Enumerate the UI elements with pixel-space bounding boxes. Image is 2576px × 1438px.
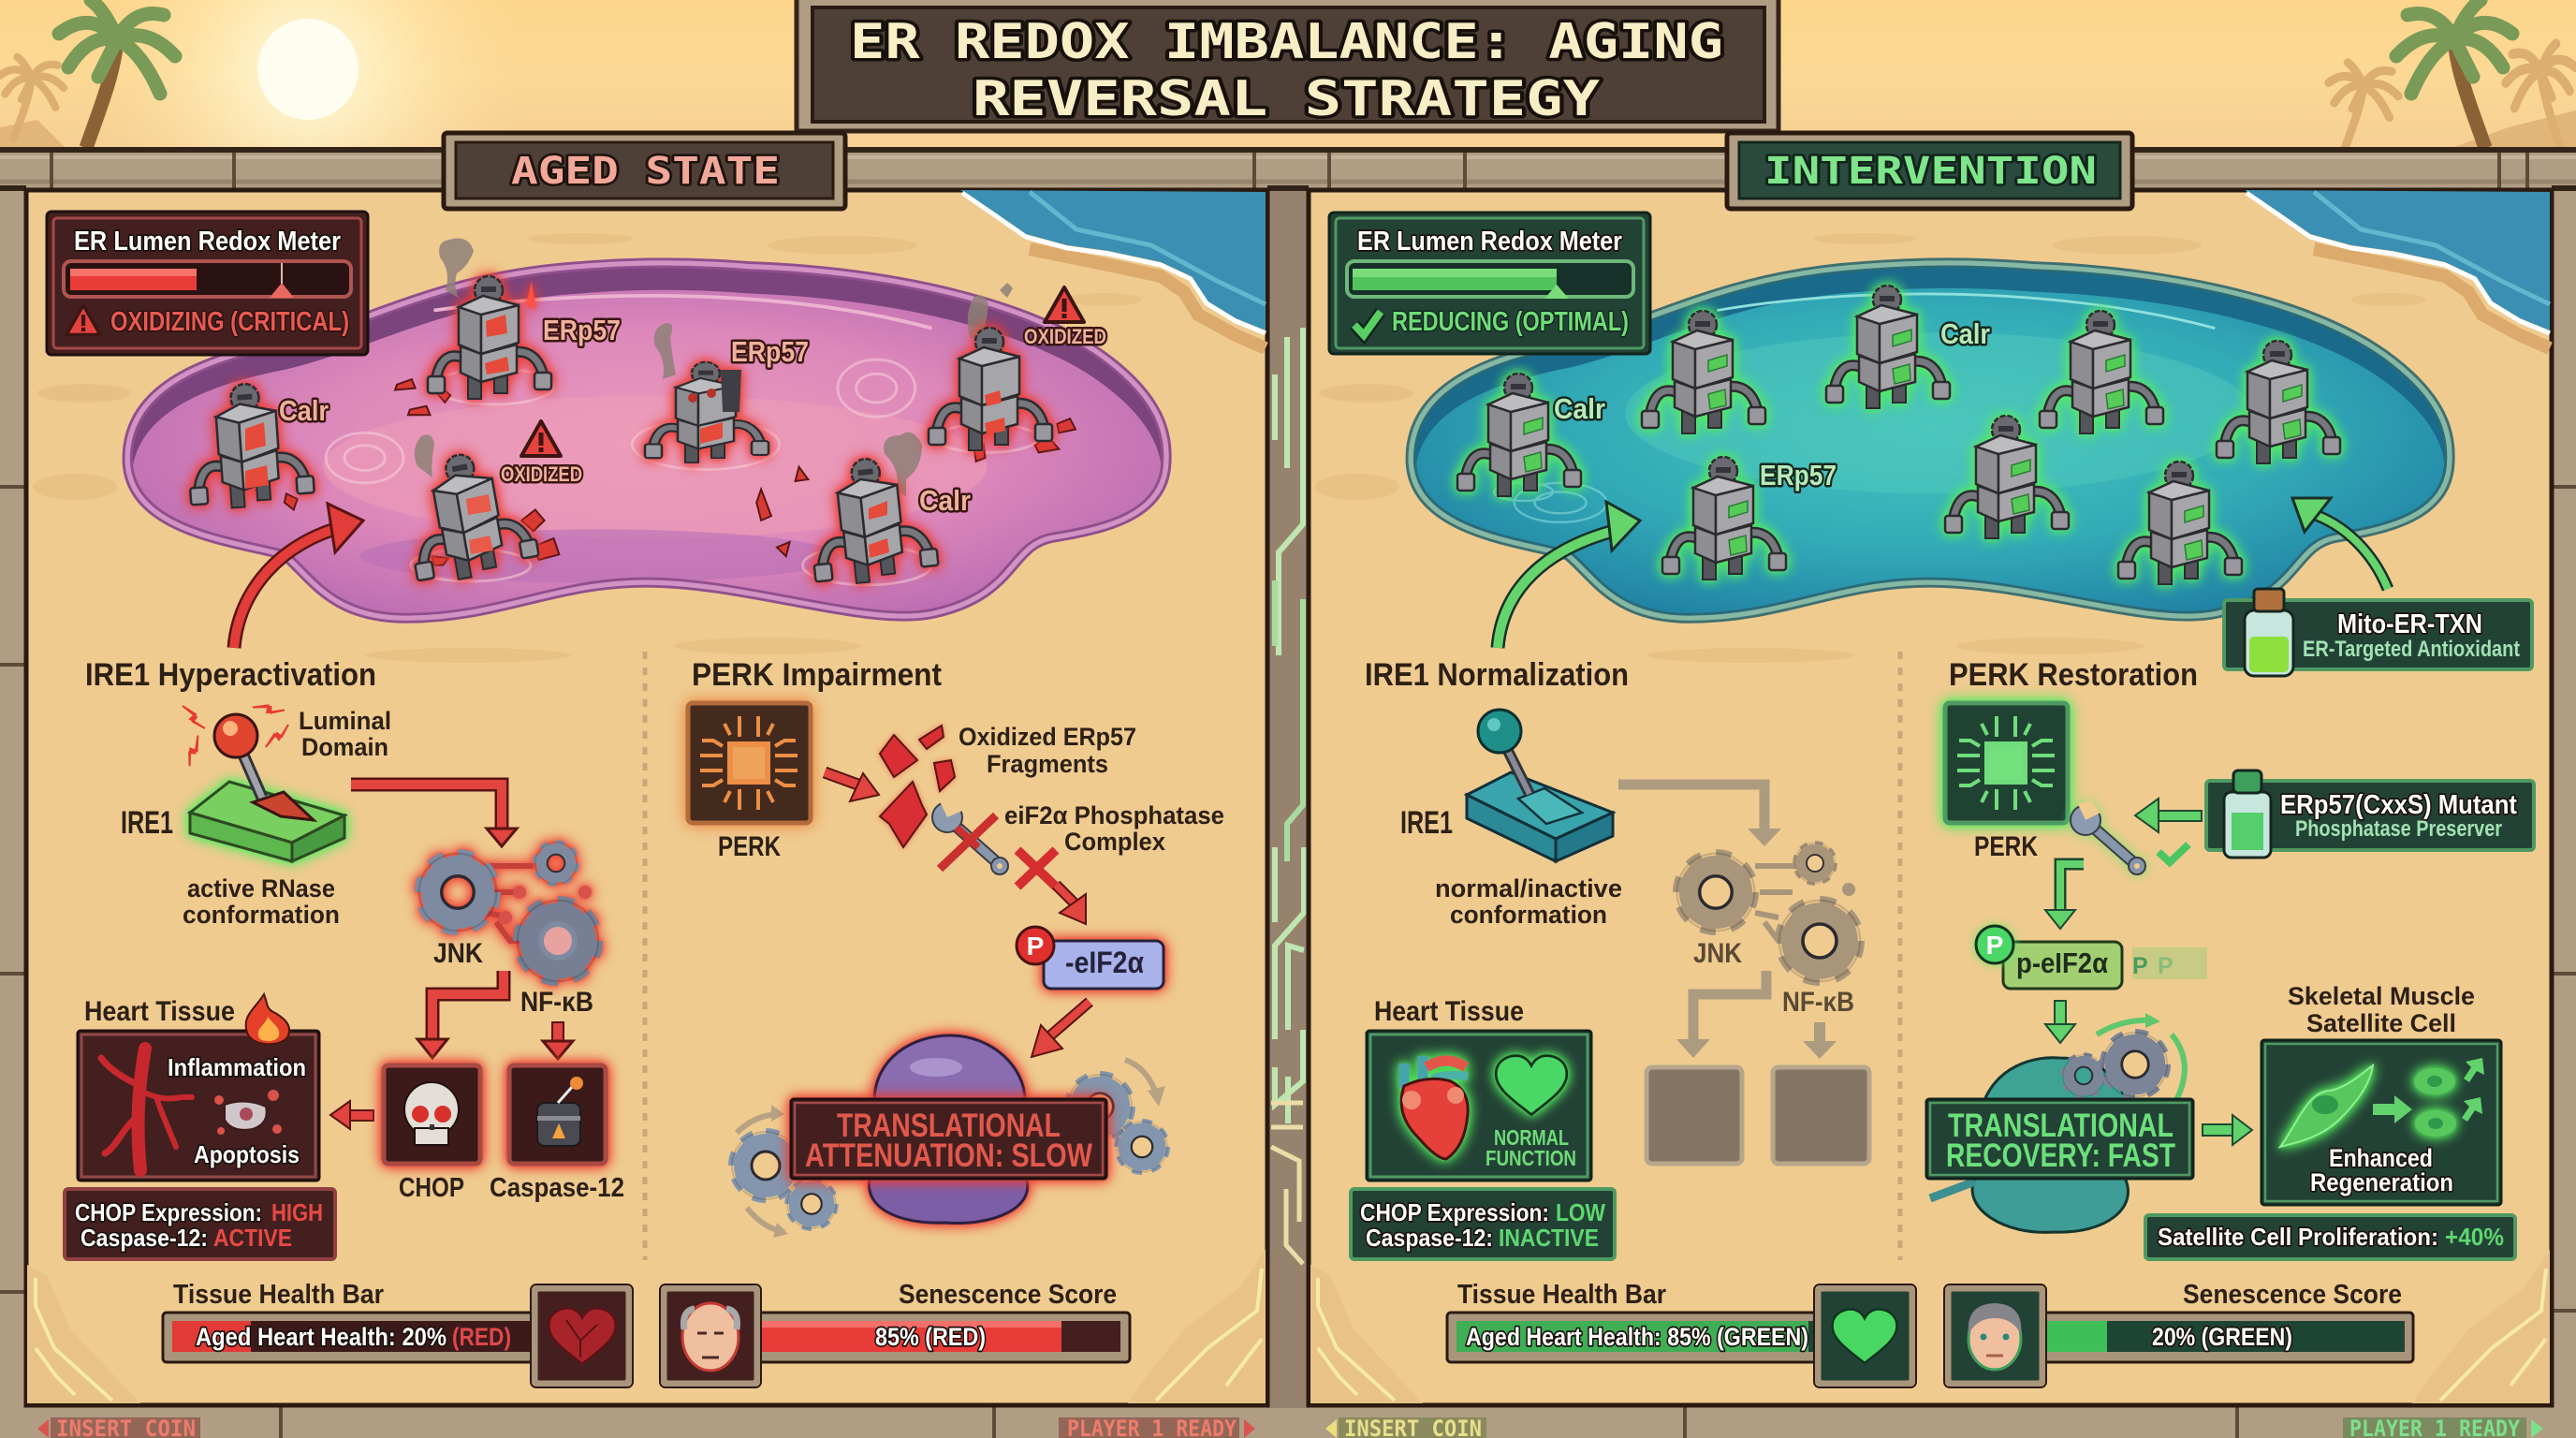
status: CHOP caspase aged: ACTIVE bbox=[213, 1224, 292, 1252]
icon: green heart badge bbox=[1814, 1284, 1916, 1387]
PERK column healthy bbox=[1926, 657, 2534, 1259]
icon: up arrows bbox=[2462, 1058, 2484, 1122]
tissue health bar aged: Tissue Health Bar bbox=[173, 1280, 384, 1310]
panel: heart tissue healthy: NORMAL bbox=[1494, 1125, 1569, 1150]
icon: p-eIF2a pill healthy bbox=[1976, 926, 2207, 989]
label: NF-kB: NF-κB bbox=[520, 987, 593, 1018]
panel: satellite cell regeneration: Enhanced bbox=[2329, 1144, 2433, 1172]
banner: translational recovery: TRANSLATIONAL bbox=[1948, 1108, 2174, 1144]
callout: Mito-ER-TXN: ER-Targeted Antioxidant bbox=[2303, 637, 2520, 662]
status: CHOP caspase healthy: LOW bbox=[1556, 1198, 1605, 1226]
redox meter: aged: ER Lumen Redox Meter bbox=[74, 227, 341, 257]
status: CHOP caspase aged bbox=[65, 1189, 335, 1259]
panel: satellite cell regeneration bbox=[2261, 1040, 2501, 1205]
icon: p-eIF2a pill healthy: P bbox=[2132, 953, 2148, 979]
icon: p-eIF2a pill healthy: P bbox=[2158, 953, 2174, 979]
icon: P-eIF2a pill aged bbox=[1017, 927, 1164, 989]
icon: teal ribosome and gears bbox=[1930, 1013, 2185, 1232]
status: CHOP caspase aged: CHOP Expression: bbox=[75, 1198, 262, 1226]
sand texture left bbox=[33, 233, 1142, 663]
panel: heart tissue aged bbox=[78, 1031, 319, 1181]
banner: translational recovery: RECOVERY: FAST bbox=[1946, 1137, 2175, 1174]
label: normal/inactive: conformation bbox=[1450, 901, 1607, 929]
arrow: mutant to wrench bbox=[2135, 799, 2202, 832]
icon: PERK chip aged bbox=[688, 703, 811, 823]
label: luminal domain bbox=[299, 707, 391, 761]
robot: Calr 1 bbox=[183, 379, 315, 510]
robot: ERp57 2 bbox=[645, 362, 768, 462]
banner: translational attenuation: TRANSLATIONAL bbox=[837, 1108, 1061, 1144]
callout: ERp57 CxxS bbox=[2206, 770, 2534, 858]
label: oxidized ERp57 fragments: Fragments bbox=[987, 750, 1108, 778]
pool labels left: OXIDIZED bbox=[1024, 325, 1106, 348]
icon: anatomical heart bbox=[1401, 1056, 1468, 1159]
pool labels left: ERp57 bbox=[731, 335, 809, 368]
title banner: REVERSAL STRATEGY bbox=[973, 71, 1601, 127]
icon: green heart bbox=[1496, 1056, 1567, 1115]
heading: PERK impairment: PERK Impairment bbox=[692, 657, 942, 693]
robot: oxidized lower bbox=[398, 444, 540, 586]
label: active RNase bbox=[183, 874, 340, 929]
pool: oxidized lumen bbox=[131, 267, 1163, 638]
arrow: muted to second box bbox=[1803, 1022, 1837, 1059]
label: luminal domain: Luminal bbox=[299, 707, 391, 735]
pool labels right: ERp57 bbox=[1760, 459, 1837, 492]
arrow: IRE1 to JNK bbox=[351, 785, 517, 846]
senescence score aged: 85% (RED) bbox=[875, 1323, 986, 1351]
robots: healthy chaperones bbox=[1457, 286, 2340, 584]
pool labels left: Calr bbox=[279, 394, 329, 427]
label: IRE1: IRE1 bbox=[1400, 805, 1453, 841]
robot: B bbox=[1642, 311, 1765, 433]
tissue health bar aged: Aged Heart Health: 20% bbox=[196, 1323, 446, 1351]
palm: right bbox=[2329, 0, 2576, 153]
arrow: CHOP to tissue bbox=[330, 1101, 373, 1129]
corner circuit traces left bbox=[27, 1250, 1266, 1403]
ocean right bbox=[2245, 190, 2550, 348]
robot: Calr A bbox=[1457, 374, 1581, 496]
tissue health bar aged bbox=[163, 1280, 633, 1387]
status: CHOP caspase healthy: CHOP Expression: bbox=[1360, 1198, 1549, 1226]
status: CHOP caspase healthy: INACTIVE bbox=[1499, 1224, 1599, 1252]
callout: ERp57 CxxS: Phosphatase Preserver bbox=[2295, 816, 2502, 842]
ripples left bbox=[326, 360, 1038, 585]
icon: slow gears bbox=[732, 1060, 1167, 1238]
centre circuit column bbox=[1267, 191, 1309, 1408]
arrow: X to eIF2a bbox=[1056, 885, 1086, 924]
label: CHOP: CHOP bbox=[399, 1173, 464, 1203]
heading: intervention: INTERVENTION bbox=[1764, 150, 2097, 193]
panel: satellite cell regeneration: Regeneration bbox=[2310, 1168, 2453, 1196]
arrow: JNK to CHOP bbox=[417, 971, 504, 1058]
arrow: PERK to fragments bbox=[825, 772, 879, 801]
sand texture right bbox=[1315, 233, 2426, 663]
icon: p-eIF2a pill healthy: p-eIF2α bbox=[2016, 946, 2108, 979]
icon: flame bbox=[246, 994, 289, 1044]
status: CHOP caspase aged: HIGH bbox=[271, 1198, 323, 1226]
senescence score aged: Senescence Score bbox=[899, 1280, 1117, 1310]
redox meter: intervention: REDUCING (OPTIMAL) bbox=[1392, 307, 1629, 337]
icon: oxidized fragments bbox=[880, 726, 955, 847]
icon: IRE1 active switch bbox=[179, 693, 344, 861]
status: CHOP caspase aged: Caspase-12: bbox=[80, 1224, 208, 1252]
label: luminal domain: Domain bbox=[301, 733, 388, 761]
pool labels left: Calr bbox=[919, 484, 971, 517]
label: IRE1: IRE1 bbox=[121, 805, 173, 841]
status: satellite proliferation: Satellite Cell Proliferation: bbox=[2158, 1223, 2438, 1251]
icon: muted gears bbox=[1677, 843, 1860, 981]
icon: purple ribosome bbox=[869, 1035, 1028, 1224]
label: JNK: JNK bbox=[433, 938, 483, 969]
icon: PERK chip healthy bbox=[1945, 703, 2068, 823]
icon: blood vessels bbox=[101, 1049, 192, 1170]
fragments left bbox=[285, 379, 1076, 565]
heading: PERK restoration: PERK Restoration bbox=[1949, 657, 2198, 693]
warning: lower bbox=[521, 421, 561, 456]
heading: IRE1 hyperactivation: IRE1 Hyperactivation bbox=[85, 657, 376, 693]
title banner bbox=[797, 0, 1778, 131]
senescence score healthy bbox=[1944, 1280, 2413, 1387]
arrow: wrench to p-eIF2a bbox=[2045, 864, 2084, 929]
tissue health bar aged: (RED) bbox=[452, 1323, 511, 1351]
PERK column aged bbox=[688, 657, 1224, 1238]
icon: p-eIF2a pill healthy: P bbox=[1986, 931, 2003, 960]
panel: heart tissue healthy: FUNCTION bbox=[1486, 1146, 1576, 1170]
pool labels left: OXIDIZED bbox=[501, 462, 582, 486]
sky background bbox=[0, 0, 2576, 154]
icon: check mark bbox=[2159, 844, 2188, 862]
icon: CHOP skull bbox=[384, 1065, 480, 1164]
icon: daughter cells bbox=[2414, 1068, 2456, 1137]
status: CHOP caspase healthy bbox=[1351, 1189, 1615, 1259]
palm: left bbox=[0, 0, 175, 148]
robot: Calr C bbox=[1826, 286, 1950, 408]
smoke bbox=[415, 238, 1013, 496]
banner: translational attenuation bbox=[791, 1099, 1106, 1179]
pool labels right: Calr bbox=[1554, 392, 1605, 425]
icon: apoptotic cell bbox=[214, 1090, 282, 1135]
arrow: green curve into pool bbox=[1498, 502, 1640, 648]
tissue health bar healthy: Tissue Health Bar bbox=[1457, 1280, 1666, 1310]
ocean left bbox=[960, 190, 1266, 348]
label: Caspase-12: Caspase-12 bbox=[490, 1173, 624, 1203]
panel: heart tissue healthy bbox=[1367, 1031, 1591, 1181]
divider bbox=[642, 652, 648, 1260]
label: JNK: JNK bbox=[1693, 938, 1742, 969]
label: PERK: PERK bbox=[1974, 831, 2038, 862]
icon: check bbox=[1354, 312, 1381, 335]
divider bbox=[1898, 652, 1902, 1260]
icon: spindle cell bbox=[2280, 1065, 2373, 1147]
senescence score healthy: Senescence Score bbox=[2183, 1280, 2402, 1310]
panel: aged state bbox=[26, 190, 1267, 1438]
arrow: NF-kB to Caspase bbox=[543, 1022, 573, 1059]
pool labels right: Calr bbox=[1940, 317, 1990, 350]
robot: ERp57 F bbox=[1662, 457, 1786, 580]
icon: young face bbox=[1944, 1284, 2046, 1387]
label: skeletal muscle satellite cell: Skeletal Muscle bbox=[2288, 982, 2475, 1010]
heading: heart tissue: Heart Tissue bbox=[84, 996, 235, 1027]
senescence score healthy: 20% (GREEN) bbox=[2152, 1323, 2292, 1351]
arrow: muted to box bbox=[1676, 971, 1766, 1058]
pool: reduced lumen bbox=[1414, 267, 2446, 636]
callout: ERp57 CxxS: ERp57(CxxS) Mutant bbox=[2280, 790, 2517, 820]
icon: antioxidant bottle bbox=[2245, 589, 2293, 676]
robot: Calr 2 bbox=[804, 452, 940, 587]
robot: H bbox=[2118, 462, 2242, 584]
sun bbox=[93, 0, 523, 285]
robot: oxidized right bbox=[929, 328, 1052, 450]
status: CHOP caspase healthy: Caspase-12: bbox=[1366, 1224, 1493, 1252]
label: normal/inactive bbox=[1435, 874, 1622, 929]
icon: P-eIF2a pill aged: -eIF2α bbox=[1065, 946, 1144, 979]
arrow: p-eIF2a to ribosome bbox=[2045, 1001, 2075, 1043]
tissue health bar healthy: Aged Heart Health: 85% (GREEN) bbox=[1466, 1323, 1808, 1351]
pool labels left: ERp57 bbox=[543, 314, 621, 346]
arrow: recovery to satellite cell bbox=[2203, 1115, 2252, 1145]
arrow: cell division bbox=[2373, 1095, 2412, 1123]
label: normal/inactive: normal/inactive bbox=[1435, 874, 1622, 902]
label: PERK: PERK bbox=[718, 831, 781, 862]
status: satellite proliferation: +40% bbox=[2445, 1223, 2504, 1251]
arrow: antioxidant into pool bbox=[2292, 498, 2388, 589]
icon: P-eIF2a pill aged: P bbox=[1027, 932, 1044, 961]
robot: G bbox=[1945, 416, 2069, 538]
robot: E bbox=[2217, 341, 2340, 463]
pool labels left bbox=[279, 314, 1106, 517]
redox meter: intervention bbox=[1329, 213, 1650, 354]
icon: damaged heart bbox=[531, 1284, 633, 1387]
label: eIF2a phosphatase complex: Complex bbox=[1064, 828, 1165, 856]
arrow: muted IRE1 to JNK bbox=[1618, 785, 1781, 846]
label: oxidized ERp57 fragments bbox=[959, 723, 1136, 778]
warning: upper bbox=[1045, 287, 1084, 322]
icon: crossed wrench bbox=[932, 798, 1008, 874]
heading: intervention bbox=[1727, 133, 2132, 209]
robot: ERp57 1 bbox=[428, 276, 551, 399]
callout: Mito-ER-TXN bbox=[2224, 589, 2532, 676]
robot: D bbox=[2040, 311, 2163, 433]
panel: intervention bbox=[1309, 133, 2552, 1438]
panel: heart tissue aged: Inflammation bbox=[168, 1053, 306, 1081]
status: satellite proliferation bbox=[2145, 1215, 2515, 1259]
heading: heart tissue: Heart Tissue bbox=[1374, 996, 1524, 1027]
banner: translational attenuation: ATTENUATION: SLOW bbox=[805, 1137, 1092, 1174]
empty box: Caspase off bbox=[1773, 1067, 1869, 1164]
label: skeletal muscle satellite cell: Satellite Cell bbox=[2306, 1009, 2456, 1037]
arrow: red curve into pool bbox=[234, 504, 363, 648]
icon: wrench healthy bbox=[2071, 800, 2145, 874]
label: active RNase: active RNase bbox=[187, 874, 335, 902]
icon: old face bbox=[660, 1284, 761, 1387]
empty box: CHOP off bbox=[1647, 1067, 1742, 1164]
redox meter: aged bbox=[47, 212, 368, 355]
icon: IRE1 normal switch bbox=[1467, 710, 1613, 861]
icon: Caspase bomb bbox=[509, 1065, 606, 1164]
label: skeletal muscle satellite cell bbox=[2288, 982, 2475, 1037]
icon: red X blocked bbox=[1017, 850, 1056, 887]
heading: IRE1 normalization: IRE1 Normalization bbox=[1365, 657, 1629, 693]
tissue health bar healthy bbox=[1447, 1280, 1916, 1387]
label: oxidized ERp57 fragments: Oxidized ERp57 bbox=[959, 723, 1136, 751]
corner circuit traces right bbox=[1310, 1250, 2550, 1403]
callout: Mito-ER-TXN: Mito-ER-TXN bbox=[2337, 609, 2482, 639]
banner: translational recovery bbox=[1926, 1099, 2193, 1179]
panel: heart tissue aged: Apoptosis bbox=[194, 1140, 300, 1168]
icon: mutant bottle bbox=[2224, 770, 2271, 858]
label: eIF2a phosphatase complex bbox=[1004, 801, 1224, 856]
arrow: eIF2a to ribosome bbox=[1032, 1002, 1090, 1057]
title banner: ER REDOX IMBALANCE: AGING bbox=[850, 14, 1723, 70]
label: active RNase: conformation bbox=[183, 901, 340, 929]
label: eIF2a phosphatase complex: eiF2α Phosphatase bbox=[1004, 801, 1224, 829]
redox meter: intervention: ER Lumen Redox Meter bbox=[1357, 227, 1622, 257]
redox meter: aged: OXIDIZING (CRITICAL) bbox=[110, 307, 349, 337]
senescence score aged bbox=[660, 1280, 1130, 1387]
heading: aged state: AGED STATE bbox=[511, 150, 780, 193]
pool labels right bbox=[1554, 317, 1990, 492]
heading: aged state bbox=[444, 133, 845, 209]
label: NF-kB: NF-κB bbox=[1782, 987, 1854, 1018]
icon: JNK and NF-kB gears bbox=[419, 843, 598, 981]
